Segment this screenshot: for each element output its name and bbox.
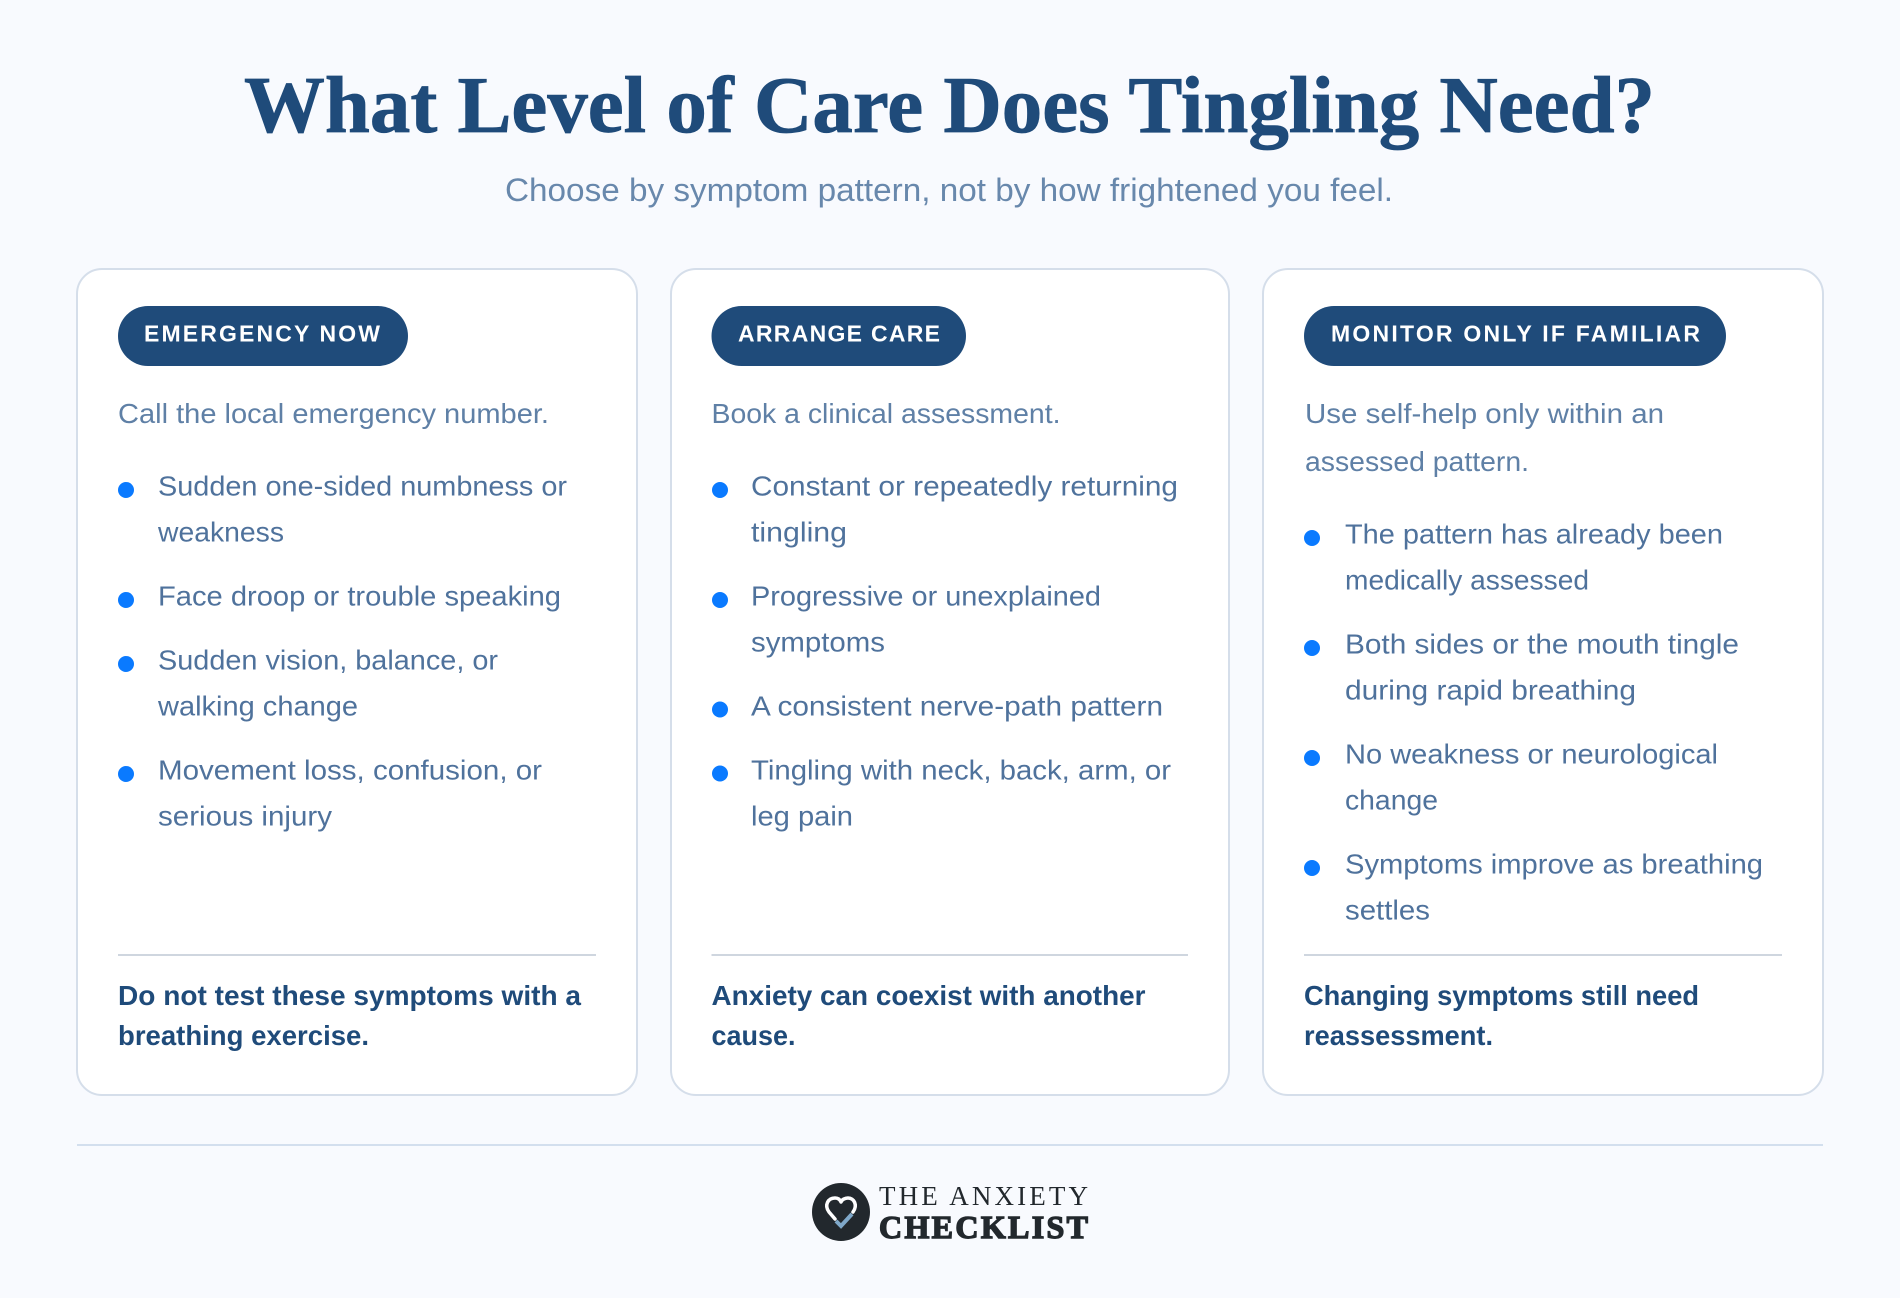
badge: emergency now: EMERGENCY NOW xyxy=(144,320,380,346)
card note: cause. xyxy=(712,1020,796,1051)
list item: one-sided numbness xyxy=(118,470,567,548)
badge: arrange care xyxy=(712,306,966,366)
list item: breathing settles: Symptoms improve as breathing xyxy=(1345,848,1763,880)
card note xyxy=(1304,980,1699,1051)
instruction text: Use self-help only within an xyxy=(1305,398,1664,429)
instruction text xyxy=(1305,398,1664,477)
logo: the anxiety checklist xyxy=(812,1181,1088,1245)
list item: breathing settles: settles xyxy=(1345,894,1430,926)
list item: movement loss: serious injury xyxy=(158,800,332,832)
symptom list xyxy=(712,470,1178,832)
badge: emergency now xyxy=(118,306,408,366)
list item: medically assessed xyxy=(1304,518,1723,596)
badge: monitor only if familiar xyxy=(1304,306,1726,366)
list item: one-sided numbness: Sudden one-sided numbness or xyxy=(158,470,567,502)
badge: arrange care: ARRANGE CARE xyxy=(738,320,940,346)
symptom list xyxy=(118,470,567,832)
instruction text: Book a clinical assessment. xyxy=(712,398,1060,429)
card note: Do not test these symptoms with a xyxy=(118,980,581,1011)
icon: heart with check mark xyxy=(812,1183,870,1241)
panel: monitor only if familiar xyxy=(1263,269,1823,1095)
list item: tingling with pain xyxy=(712,754,1171,832)
card note: breathing exercise. xyxy=(118,1020,369,1051)
list item: medically assessed: medically assessed xyxy=(1345,564,1589,596)
list item: vision and balance: walking change xyxy=(157,690,358,722)
list item: both sides: Both sides or the mouth tingle xyxy=(1345,628,1739,660)
list item: no weakness: No weakness or neurological xyxy=(1345,738,1718,770)
list item: both sides xyxy=(1304,628,1739,706)
card note xyxy=(118,980,581,1051)
list item: vision and balance: Sudden vision, balance, or xyxy=(158,644,498,676)
card note: Anxiety can coexist with another xyxy=(712,980,1146,1011)
list item: tingling with pain: leg pain xyxy=(751,800,853,832)
list item: no weakness: change xyxy=(1345,784,1438,816)
list item: movement loss: Movement loss, confusion, or xyxy=(158,754,542,786)
subtitle: Choose by symptom pattern, not by how frightened you feel. xyxy=(505,172,1393,208)
instruction text: assessed pattern. xyxy=(1305,446,1529,477)
list item: tingling with pain: Tingling with neck, back, arm, or xyxy=(751,754,1171,786)
logo: the anxiety checklist: CHECKLIST xyxy=(879,1209,1088,1245)
list item: medically assessed: The pattern has already been xyxy=(1345,518,1723,550)
list item: vision and balance xyxy=(118,644,498,722)
list item: both sides: during rapid breathing xyxy=(1345,674,1636,706)
symptom list xyxy=(1304,518,1763,926)
list item: face droop: Face droop or trouble speaking xyxy=(158,580,561,612)
card note: Changing symptoms still need xyxy=(1304,980,1699,1011)
panel: arrange care xyxy=(671,269,1229,1095)
card note xyxy=(712,980,1146,1051)
list item: constant tingling: tingling xyxy=(751,516,847,548)
title: What Level of Care Does Tingling Need? xyxy=(244,62,1655,150)
list item: no weakness xyxy=(1304,738,1718,816)
card note: reassessment. xyxy=(1304,1020,1493,1051)
list item: movement loss xyxy=(118,754,542,832)
instruction text: Call the local emergency number. xyxy=(118,398,549,429)
list item: progressive symptoms: Progressive or unexplained xyxy=(751,580,1101,612)
list item: progressive symptoms: symptoms xyxy=(751,626,885,658)
list item: breathing settles xyxy=(1304,848,1763,926)
list item: one-sided numbness: weakness xyxy=(157,516,284,548)
list item: progressive symptoms xyxy=(712,580,1101,658)
list item: constant tingling xyxy=(712,470,1178,548)
logo: the anxiety checklist: THE ANXIETY xyxy=(879,1181,1088,1211)
panel: emergency now xyxy=(77,269,637,1095)
list item: nerve-path pattern: A consistent nerve-path pattern xyxy=(751,690,1163,722)
badge: monitor only if familiar: MONITOR ONLY IF FAMILIAR xyxy=(1331,320,1700,346)
list item: constant tingling: Constant or repeatedly returning xyxy=(751,470,1178,502)
